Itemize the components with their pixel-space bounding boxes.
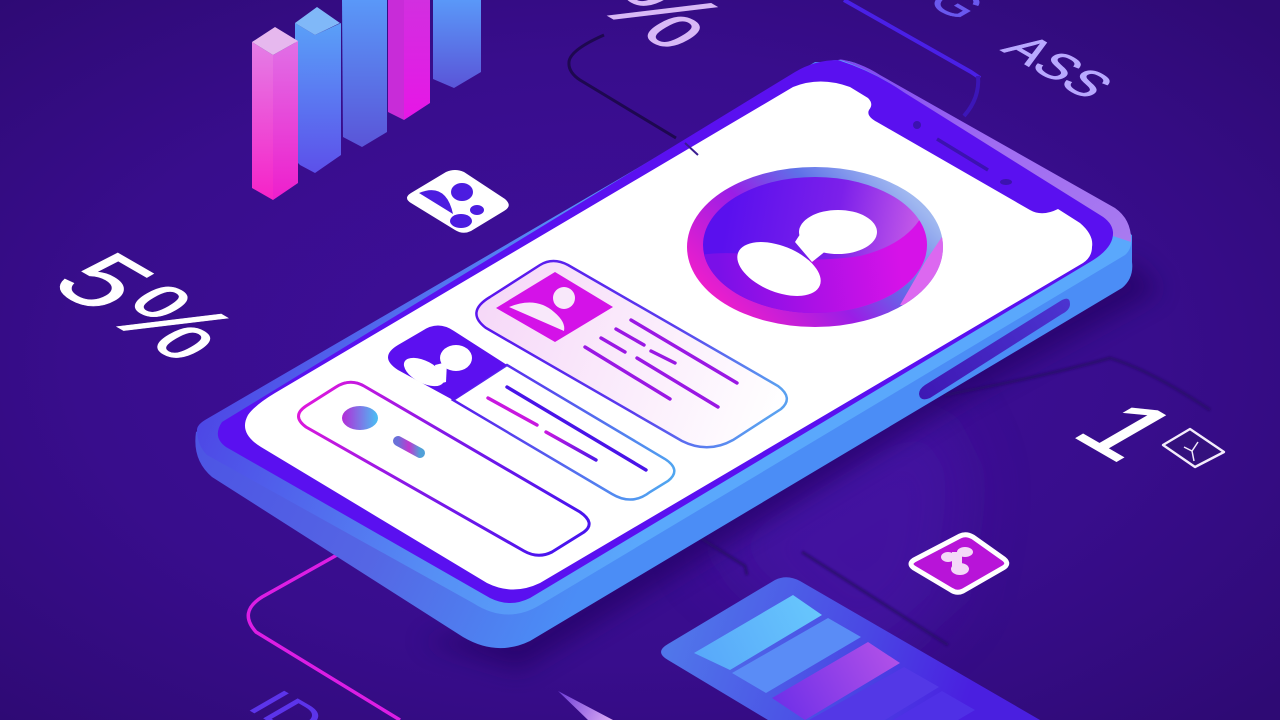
gradient pill	[398, 441, 420, 453]
tick mark on bezel	[685, 143, 698, 155]
connector line: blue upper right	[844, 0, 980, 116]
avatar person	[730, 210, 877, 307]
card picture	[496, 272, 613, 342]
connector lines: dark lower	[675, 358, 1210, 645]
text: 5 percent: %	[80, 269, 264, 376]
icon: small outline badge	[1163, 429, 1224, 467]
card text lines	[585, 320, 737, 407]
phone lavender edge highlight	[838, 59, 1131, 242]
dashboard panel	[661, 577, 1040, 720]
text: 5 percent	[27, 237, 264, 376]
profile card top	[476, 261, 787, 447]
text: G ASS	[915, 0, 1126, 106]
phone drop shadow	[420, 260, 1160, 670]
phone screen	[245, 82, 1092, 590]
phone edge band	[197, 60, 1131, 615]
phone body side	[195, 62, 1132, 648]
light floor glow	[700, 400, 970, 680]
text: 5 percent: 5	[27, 237, 180, 326]
header person	[399, 345, 472, 392]
text: 1: 1	[1049, 385, 1206, 476]
avatar circle	[687, 167, 950, 327]
speaker and camera	[913, 121, 1012, 185]
card text lines	[488, 387, 646, 470]
settings card bottom	[298, 382, 589, 555]
profile card middle	[388, 326, 674, 500]
icon: magenta badge	[911, 535, 1007, 592]
wedge highlight	[558, 691, 613, 720]
text: G ASS: ASS	[990, 27, 1126, 106]
connector line: dark upper left	[569, 35, 676, 138]
phone bezel	[218, 60, 1113, 603]
icon: people badge	[407, 170, 509, 233]
connector line: magenta	[248, 546, 400, 720]
blue header	[388, 326, 507, 400]
panel stripes	[694, 595, 822, 670]
phone side button	[919, 299, 1070, 399]
bar chart	[252, 0, 481, 200]
gradient dot	[342, 406, 378, 430]
phone	[195, 59, 1132, 648]
